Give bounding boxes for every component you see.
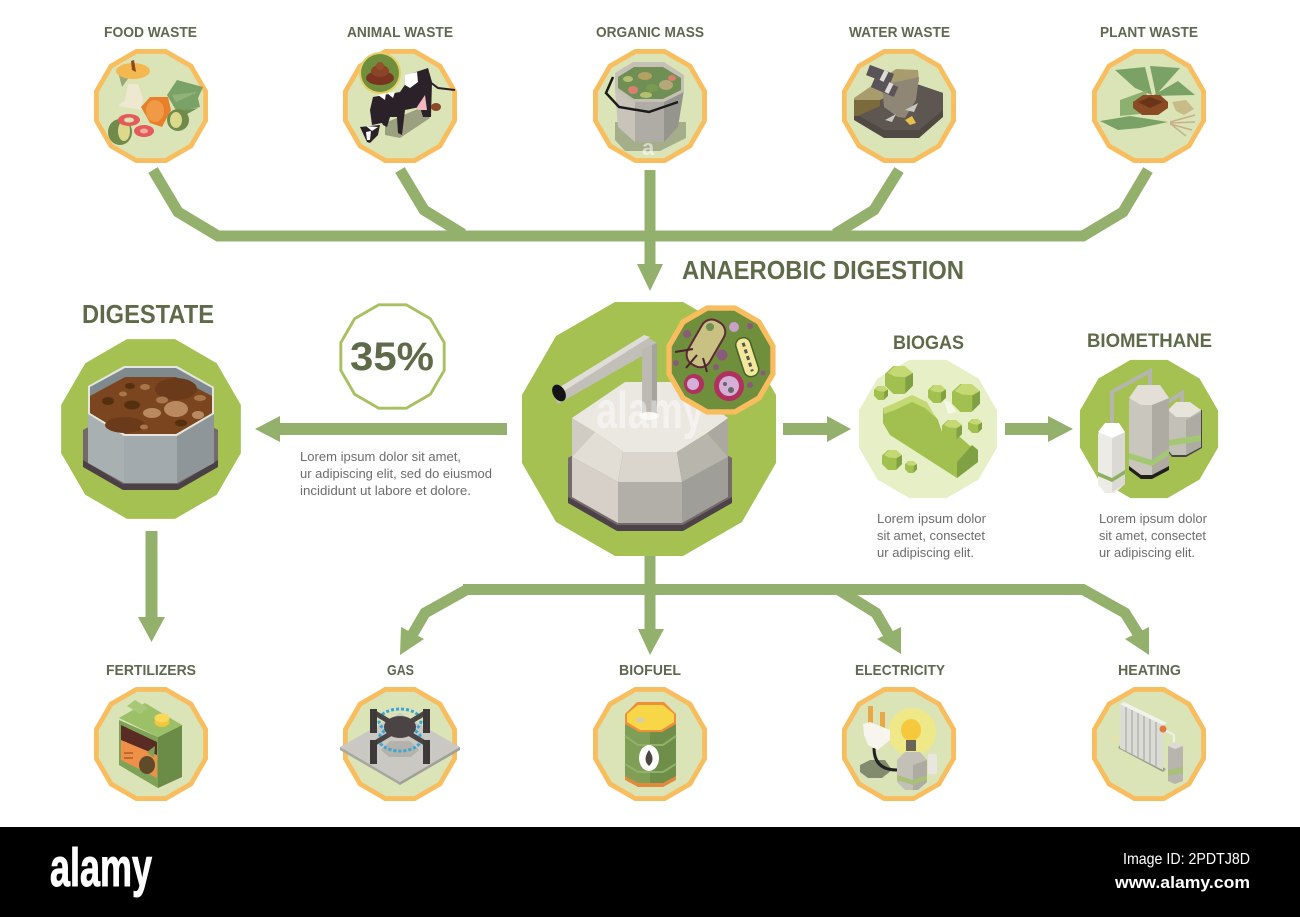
item: organic mass bbox=[593, 24, 707, 163]
item: organic mass: a bbox=[642, 135, 655, 160]
footer bar bbox=[0, 827, 1300, 917]
item: biofuel: BIOFUEL bbox=[619, 662, 681, 679]
image id: Image ID: 2PDTJ8D bbox=[1123, 851, 1250, 868]
item: organic mass: ORGANIC MASS bbox=[596, 24, 704, 41]
item: plant waste: PLANT WASTE bbox=[1100, 24, 1198, 41]
connector: inputs to digester bbox=[153, 170, 1148, 291]
text: digestate description: ur adipiscing elit, sed do eiusmod bbox=[300, 466, 492, 481]
text: biomethane description: sit amet, consectet bbox=[1099, 528, 1206, 543]
item: heating: HEATING bbox=[1118, 662, 1181, 679]
item: gas bbox=[340, 662, 460, 801]
item: biofuel bbox=[593, 662, 707, 801]
text: digestate description: Lorem ipsum dolor sit amet, bbox=[300, 449, 461, 464]
text: biomethane description: Lorem ipsum dolor bbox=[1099, 511, 1208, 526]
item: heating bbox=[1092, 662, 1206, 801]
item: animal waste: ANIMAL WASTE bbox=[347, 24, 453, 41]
connector: digester to outputs bbox=[400, 556, 1149, 655]
statistic: 35 percent: 35% bbox=[350, 335, 434, 379]
heading: anaerobic digestion: ANAEROBIC DIGESTION bbox=[682, 255, 964, 285]
item: food waste: FOOD WASTE bbox=[104, 24, 197, 41]
item: electricity: ELECTRICITY bbox=[855, 662, 945, 679]
text: digestate description: incididunt ut labore et dolore. bbox=[300, 483, 471, 498]
panel: digester: alamy bbox=[596, 382, 704, 440]
item: plant waste bbox=[1092, 24, 1206, 163]
text: biogas description: ur adipiscing elit. bbox=[877, 545, 974, 560]
arrow: digester to digestate bbox=[255, 416, 507, 442]
item: fertilizers bbox=[94, 662, 208, 801]
text: biogas description: sit amet, consectet bbox=[877, 528, 985, 543]
website: www.alamy.com bbox=[1114, 873, 1250, 892]
icon: bacteria magnifier bbox=[666, 305, 776, 415]
heading: biogas: BIOGAS bbox=[893, 332, 964, 354]
item: gas: GAS bbox=[387, 662, 414, 679]
text: biogas description: Lorem ipsum dolor bbox=[877, 511, 987, 526]
arrow: digestate to fertilizers bbox=[138, 531, 165, 642]
item: fertilizers: FERTILIZERS bbox=[106, 662, 196, 679]
statistic: 35 percent bbox=[339, 303, 446, 410]
heading: digestate: DIGESTATE bbox=[82, 299, 214, 329]
item: food waste bbox=[94, 24, 208, 163]
panel: digestate tank bbox=[61, 339, 241, 519]
item: animal waste bbox=[343, 24, 457, 163]
text: digestate description bbox=[300, 449, 492, 498]
item: electricity bbox=[842, 662, 956, 801]
logo: alamy: alamy bbox=[50, 838, 152, 898]
heading: biomethane: BIOMETHANE bbox=[1087, 330, 1212, 352]
arrow: biogas to biomethane bbox=[1005, 416, 1073, 442]
item: water waste bbox=[842, 24, 956, 163]
text: biomethane description bbox=[1099, 511, 1208, 560]
panel: biomethane tanks bbox=[1080, 360, 1218, 498]
text: biomethane description: ur adipiscing elit. bbox=[1099, 545, 1195, 560]
item: water waste: WATER WASTE bbox=[849, 24, 950, 41]
arrow: digester to biogas bbox=[783, 416, 851, 442]
panel: digester bbox=[522, 302, 776, 556]
text: biogas description bbox=[877, 511, 987, 560]
panel: biogas cloud bbox=[859, 360, 997, 498]
